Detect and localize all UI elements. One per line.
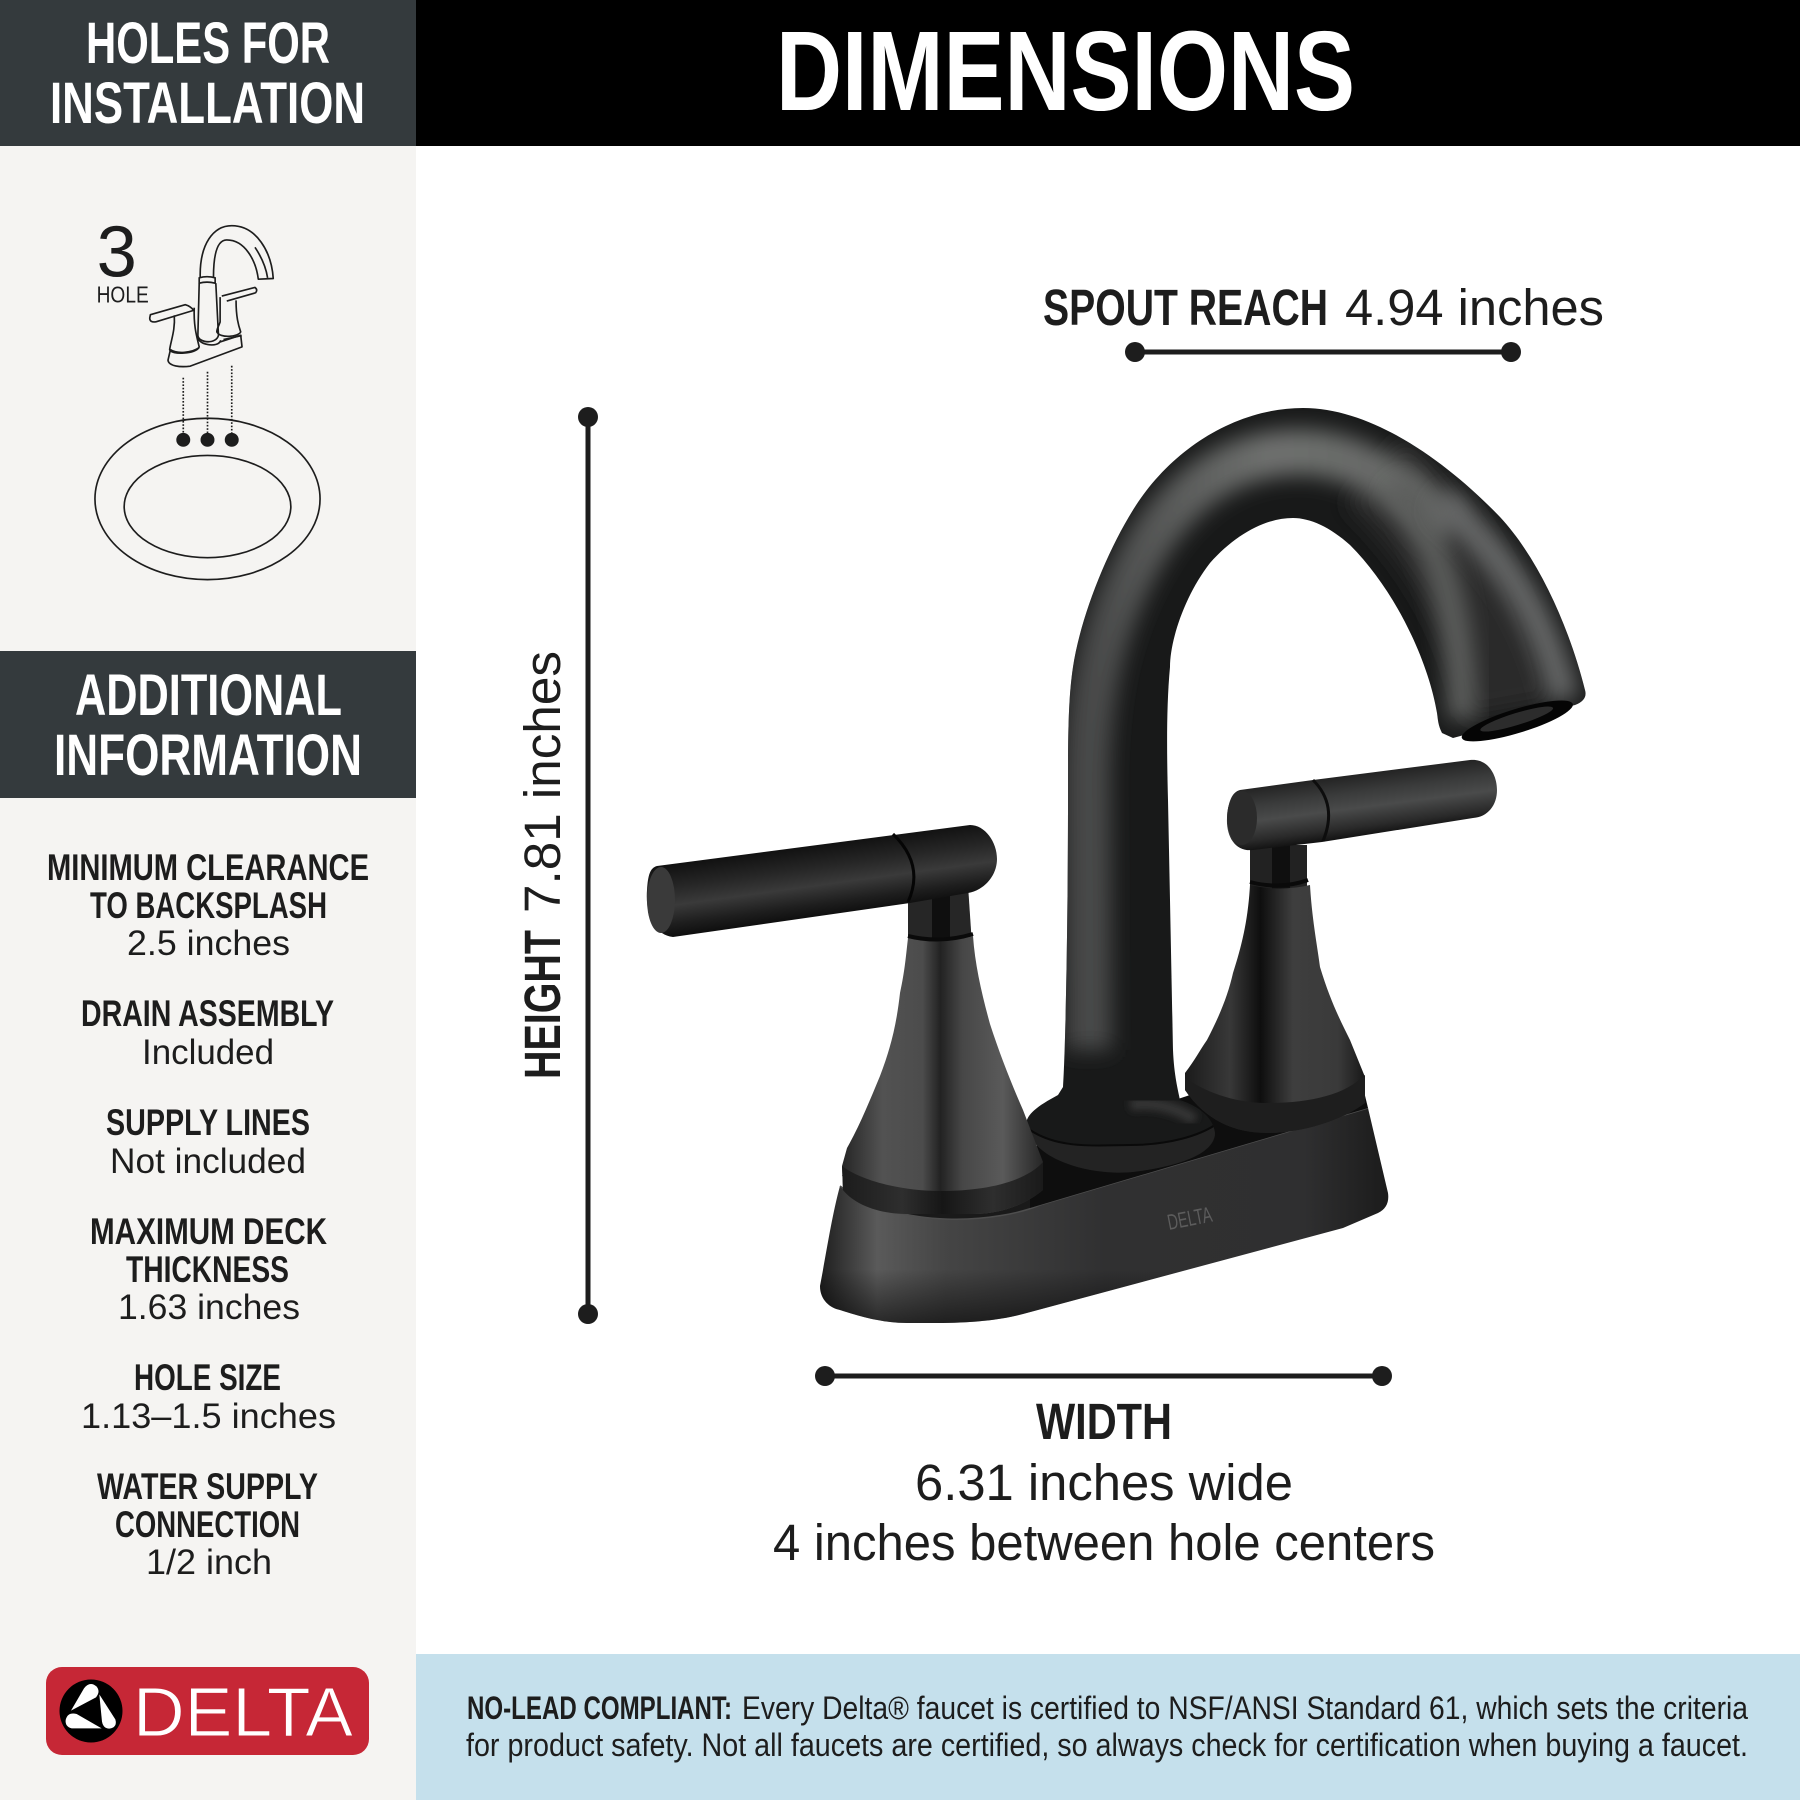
dimension: width: WIDTH <box>1036 1393 1172 1450</box>
dimension: spout reach: SPOUT REACH <box>1043 279 1328 336</box>
heading: additional information: INFORMATION <box>54 723 362 788</box>
title banner: DIMENSIONS <box>776 8 1355 134</box>
text block: additional information list: THICKNESS <box>126 1249 289 1290</box>
heading: holes for installation: INSTALLATION <box>50 71 365 136</box>
faucet: deck plate: DELTA <box>1165 1202 1214 1235</box>
dimension: height: 7.81 inches <box>514 651 571 913</box>
text block: additional information list: DRAIN ASSEMBLY <box>81 993 334 1034</box>
icon: dotted drop lines <box>183 366 232 433</box>
dimension: width <box>773 1366 1435 1571</box>
faucet: right handle <box>1185 760 1497 1133</box>
icon: three hole faucet and sink diagram: HOLE <box>97 282 149 308</box>
icon: three hole faucet and sink diagram: 3 <box>97 211 137 292</box>
logo: Delta: DELTA <box>133 1673 353 1751</box>
text block: additional information list <box>47 847 369 1582</box>
text block: additional information list: MINIMUM CLEARANCE <box>47 847 369 888</box>
text block: additional information list: 1.63 inches <box>118 1288 300 1327</box>
icon: sink outline <box>95 418 320 580</box>
text block: additional information list: Not included <box>110 1142 306 1181</box>
icon: three hole faucet and sink diagram <box>95 211 320 580</box>
callout: no-lead compliant <box>416 1654 1800 1800</box>
logo: Delta <box>46 1667 369 1755</box>
text block: additional information list: CONNECTION <box>115 1504 300 1545</box>
text block: additional information list: 2.5 inches <box>127 924 290 963</box>
heading: holes for installation <box>0 0 416 146</box>
faucet: aerator <box>1458 693 1576 749</box>
text block: additional information list: 1.13–1.5 inches <box>81 1397 336 1436</box>
faucet: spout <box>1020 400 1600 1190</box>
dimension: spout reach <box>1043 279 1604 362</box>
heading: holes for installation: HOLES FOR <box>86 11 330 76</box>
faucet: deck plate <box>820 1075 1388 1323</box>
dimension: spout reach: 4.94 inches <box>1345 279 1604 336</box>
text block: additional information list: SUPPLY LINES <box>106 1102 310 1143</box>
dimension: width: 6.31 inches wide <box>915 1454 1293 1511</box>
icon: delta triangle drops <box>66 1684 116 1729</box>
text block: additional information list: WATER SUPPLY <box>97 1466 318 1507</box>
panel: left sidebar background <box>0 0 416 1800</box>
text block: additional information list: MAXIMUM DECK <box>90 1211 327 1252</box>
text block: additional information list: TO BACKSPLASH <box>90 885 327 926</box>
callout: no-lead compliant: NO-LEAD COMPLIANT: <box>467 1690 732 1726</box>
text block: additional information list: 1/2 inch <box>146 1543 272 1582</box>
dimension: height <box>514 407 598 1324</box>
dimension: width: 4 inches between hole centers <box>773 1514 1435 1571</box>
faucet product image <box>647 400 1600 1323</box>
heading: additional information <box>0 651 416 798</box>
dimension: height: HEIGHT <box>514 930 571 1079</box>
heading: additional information: ADDITIONAL <box>75 663 342 728</box>
text block: additional information list: Included <box>142 1033 274 1072</box>
icon: small faucet outline <box>150 226 273 367</box>
faucet: left handle <box>647 825 1043 1214</box>
title banner <box>416 0 1800 146</box>
text block: additional information list: HOLE SIZE <box>134 1357 281 1398</box>
